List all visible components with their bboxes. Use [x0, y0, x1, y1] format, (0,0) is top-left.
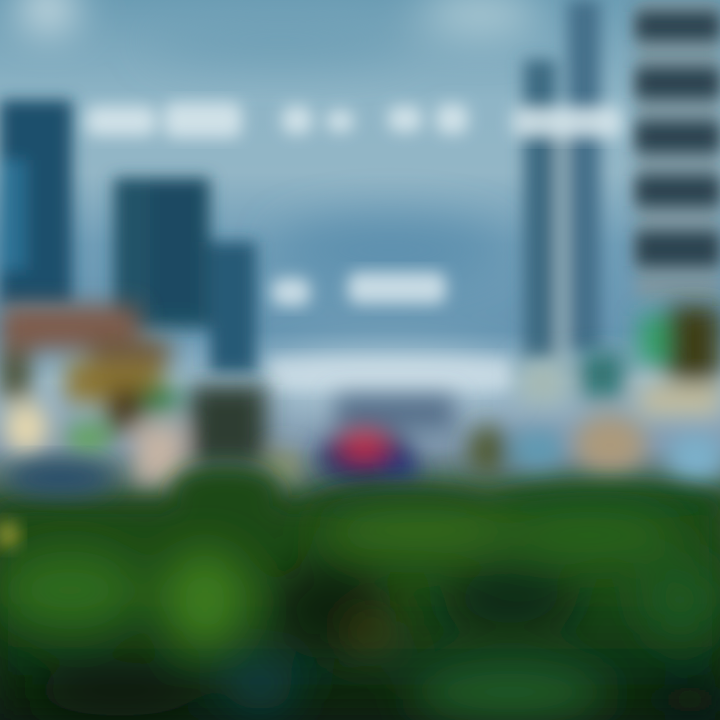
left buildings: [0, 100, 256, 372]
yellow patch at left edge: [0, 521, 20, 549]
blurred heading, second line: [272, 272, 446, 306]
clouds and sun glow: [22, 0, 540, 398]
right building floor bands: [636, 12, 720, 266]
right towers: [524, 0, 720, 370]
centre red and blue structure: [318, 395, 455, 486]
blurred heading, first line: [86, 102, 622, 138]
left roof and low colourful buildings: [0, 305, 302, 484]
blurred heading, third line: [268, 358, 512, 390]
blue vehicle at left: [6, 460, 114, 496]
right low colourful buildings: [468, 306, 720, 484]
green tree canopy: [0, 460, 720, 720]
